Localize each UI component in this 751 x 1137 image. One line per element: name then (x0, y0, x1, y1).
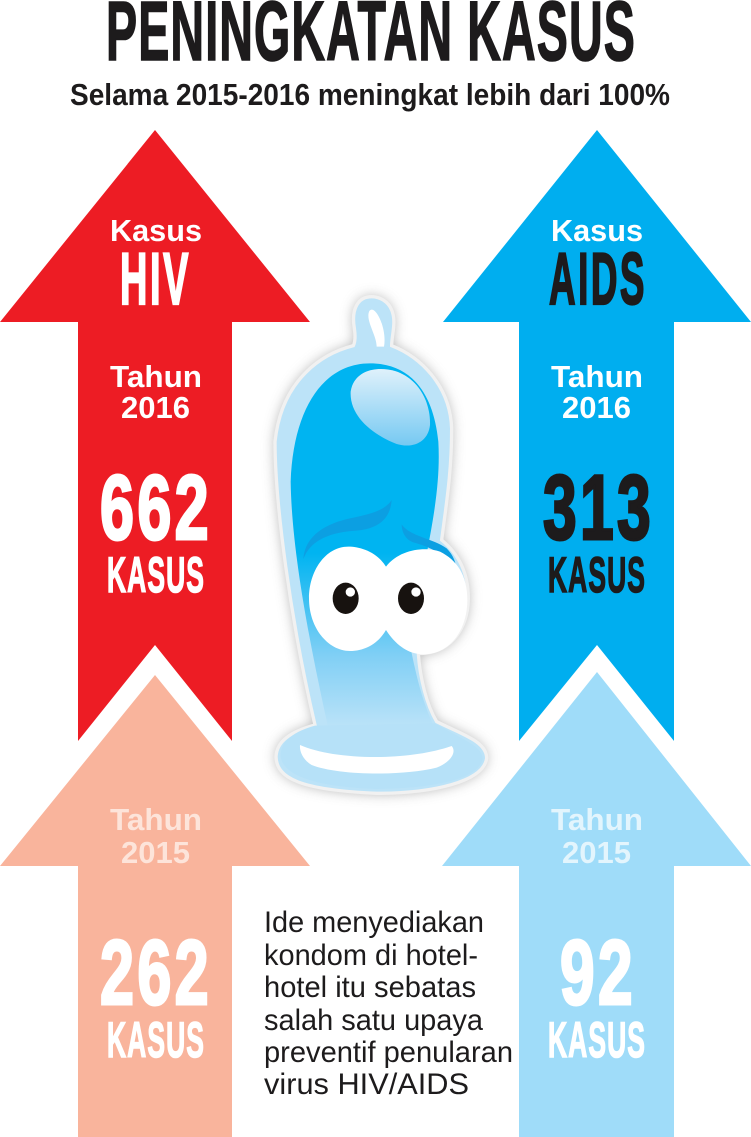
label: Tahun 2016: Tahun (551, 359, 643, 394)
subtitle: Selama 2015-2016 meningkat lebih dari 100% (70, 77, 670, 112)
number: 262 kasus: KASUS (107, 1012, 205, 1068)
text block: note: kondom di hotel- (264, 939, 478, 972)
label: Kasus AIDS: Kasus (551, 213, 643, 248)
number: 662 kasus (100, 457, 212, 603)
text block: note: hotel itu sebatas (264, 971, 476, 1004)
number: 262 kasus (100, 922, 212, 1068)
label: Tahun 2016 (551, 359, 643, 425)
panel: AIDS 2015 light blue arrow (442, 672, 751, 1137)
text block: note: virus HIV/AIDS (264, 1068, 469, 1101)
eyes (309, 547, 467, 654)
base highlight (300, 745, 454, 774)
number: 313 kasus (543, 457, 654, 603)
number: 92 kasus: 92 (560, 922, 636, 1024)
right eyebrow (402, 524, 456, 571)
icon: condom mascot (275, 297, 487, 793)
text block: note: salah satu upaya (264, 1004, 483, 1037)
head highlight (351, 369, 430, 446)
number: 92 kasus: KASUS (548, 1012, 646, 1068)
number: 662 kasus: 662 (100, 457, 212, 559)
number: 662 kasus: KASUS (107, 547, 205, 603)
label: Kasus HIV: Kasus (110, 213, 202, 248)
text block: note: preventif penularan (264, 1036, 513, 1069)
body inner (291, 363, 439, 728)
number: 262 kasus: 262 (100, 922, 212, 1024)
label: Tahun 2015 (551, 802, 643, 870)
base lip (281, 723, 483, 789)
label: Tahun 2016: 2016 (562, 390, 631, 425)
number: 92 kasus (548, 922, 646, 1068)
right pupil (398, 583, 424, 614)
label: Tahun 2015: 2015 (562, 835, 631, 870)
panel: HIV 2016 red arrow (0, 130, 310, 741)
panel: HIV 2015 pink arrow (0, 675, 310, 1137)
left pupil (333, 583, 359, 614)
tip highlight (368, 310, 385, 347)
label: Tahun 2016: Tahun (110, 359, 202, 394)
text block: note (264, 906, 513, 1101)
label: Tahun 2016: 2016 (121, 390, 190, 425)
label: Kasus AIDS: AIDS (549, 239, 647, 320)
number: 313 kasus: KASUS (548, 547, 646, 603)
body outline (275, 297, 487, 793)
text block: note: Ide menyediakan (264, 906, 484, 939)
panel: AIDS 2016 blue arrow (443, 130, 751, 741)
label: Tahun 2015: Tahun (110, 802, 202, 837)
label: Tahun 2015: Tahun (551, 802, 643, 837)
number: 313 kasus: 313 (543, 457, 654, 559)
label: Kasus HIV (110, 213, 202, 320)
label: Kasus AIDS (549, 213, 647, 320)
label: Tahun 2016 (110, 359, 202, 425)
label: Tahun 2015 (110, 802, 202, 870)
label: Tahun 2015: 2015 (121, 835, 190, 870)
label: Kasus HIV: HIV (120, 239, 191, 320)
left eyebrow (303, 500, 392, 559)
